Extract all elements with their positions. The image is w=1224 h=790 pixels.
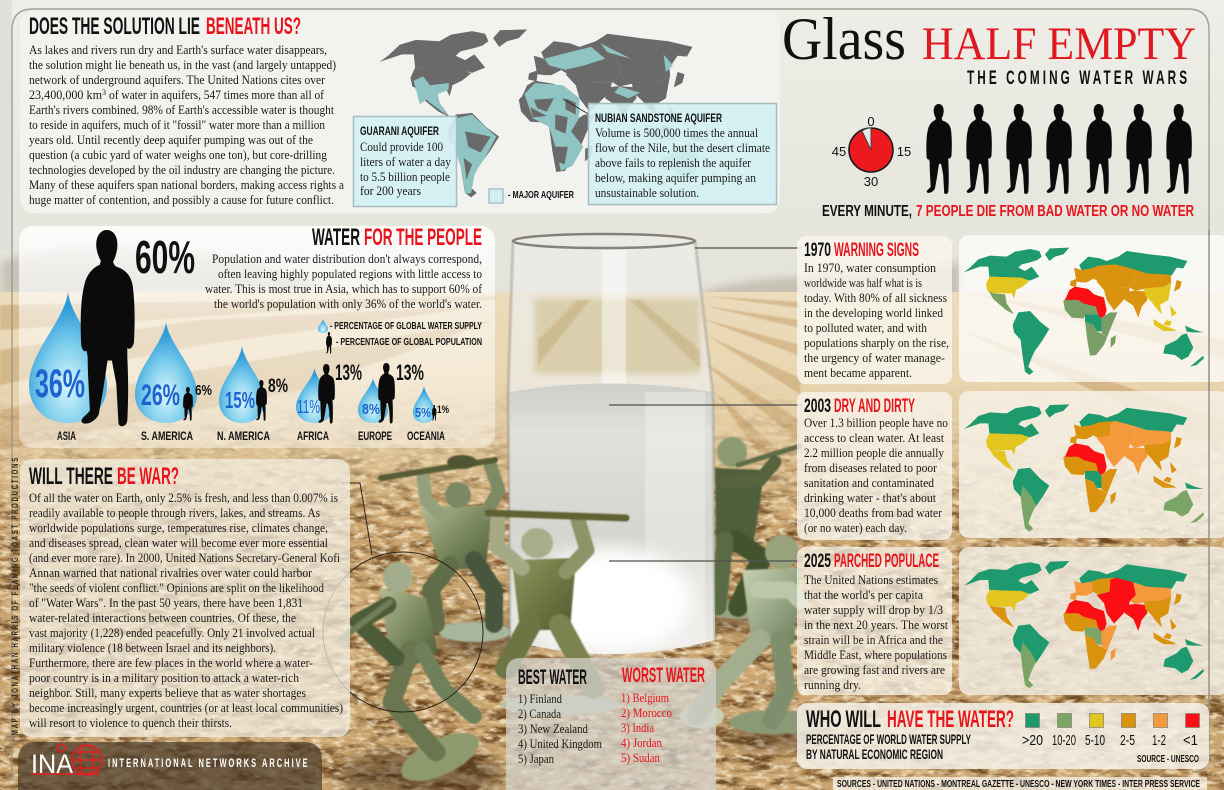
soldier: kneeling rifleman behind glass [707,437,800,619]
pictogram: Africa: 11% [297,397,320,417]
panel: best and worst water [506,658,716,790]
panel: 1970 warning signs: populations sharply on the rise, [804,336,949,350]
panel: 1970 warning signs: today. With 80% of all sickness [804,291,947,305]
background: distant hills [0,246,960,300]
panel: 1970 warning signs: 1970 [804,240,831,261]
soldier: foreground in circle [340,562,486,790]
heading: will there be war: BE WAR? [117,463,179,490]
panel: 2025 parched populace: PARCHED POPULACE [834,551,939,572]
pictogram: Africa: AFRICA [297,431,329,443]
panel: aquifers [20,11,780,213]
soldier: foreground right [680,535,821,734]
list: worst water: 2) Morocco [621,706,672,720]
panel: 2003 dry and dirty: (or no water) each day. [804,521,907,535]
pictogram: Oceania: OCEANIA [407,431,445,443]
logo: International Networks Archive: INTERNATIONAL NETWORKS ARCHIVE [108,757,308,771]
panel: 2003 dry and dirty: from diseases related to poor [804,461,938,475]
heading: water for the people: WATER [312,224,360,251]
pictogram: Europe: 8% [362,401,380,418]
text: aquifer body [29,43,344,207]
panel: 1970 warning signs: ment became apparent. [804,366,912,380]
panel: 2003 dry and dirty: DRY AND DIRTY [834,396,915,417]
title block: Glass [782,6,906,72]
text: population body: Population and water distribution don't always correspond, [212,252,482,266]
text: war body: vast majority (1,228) ended peacefully. Only 21 involved actual [29,626,315,640]
text: aquifer body: years old. Until recently deep aquifer pumping was out of the [29,133,313,147]
text: aquifer body: Earth's rivers combined. 98% of Earth's accessible water is thought [29,103,334,117]
pictogram: Africa [296,360,362,443]
legend: drop and person: - PERCENTAGE OF GLOBAL POPULATION [336,336,482,348]
text: war body: (and ever more rare). In 2000, United Nations Secretary-General Kofi [29,551,340,565]
legend: swatch labels: 10-20 [1052,732,1076,749]
heading: who will have the water: HAVE THE WATER? [887,706,1014,733]
text: legend description: PERCENTAGE OF WORLD WATER SUPPLY [806,731,971,747]
text: war body: Of all the water on Earth, only 2.5% is fresh, and less than 0.007% is [29,491,338,505]
pictogram: Europe: 13% [396,360,424,385]
background: sand [0,292,1224,790]
text: war body: Furthermore, there are few places in the world where a water- [29,656,313,670]
text: war body: will resort to violence to quench their thirsts. [29,716,232,730]
text: legend description [806,731,971,762]
pictogram: Europe: EUROPE [358,431,392,443]
heading: who will have the water [806,706,1014,733]
text: war body: neighbor. Still, many experts believe that as water shortages [29,686,306,700]
panel: 1970 warning signs [797,236,952,384]
pictogram: N. America: N. AMERICA [217,431,270,443]
pictogram: Asia: 36% [35,362,85,406]
seven people silhouettes [926,104,1192,194]
text: population body: often leaving highly populated regions with little access to [218,267,482,281]
panel: 1970 warning signs: WARNING SIGNS [834,240,919,261]
text: war body [29,491,343,730]
soldier: aiming overhead, centre [488,513,626,715]
soldier: raising rifle, rear left [381,455,511,642]
background: left strip [0,0,12,250]
clock icon: 45 [832,144,846,159]
title block: HALF EMPTY [922,18,1196,70]
pictogram: Oceania [407,386,449,443]
list: worst water: 1) Belgium [621,691,669,705]
panel: 2025 parched populace: running dry. [804,678,861,692]
shadows under soldiers [335,601,835,790]
text: war body: become increasingly urgent, countries (or at least local communities) [29,701,343,715]
text: war body: Annan warned that national rivalries over water could harbor [29,566,313,580]
panel: 2025 parched populace: strain will be in Africa and the [804,633,943,647]
callout: Guarani aquifer: GUARANI AQUIFER [360,124,439,138]
panel: 2003 dry and dirty: drinking water - that's about [804,491,936,505]
legend: swatch labels [1022,732,1198,749]
panel: 1970 warning signs: to polluted water, and with [804,321,928,335]
panel: 1970 warning signs: In 1970, water consumption [804,261,937,275]
list: best water: 3) New Zealand [518,722,589,736]
text: war body: and diseases spread, clean water will become ever more essential [29,536,328,550]
callout: Nubian sandstone aquifer: flow of the Nile, but the desert climate [595,141,770,155]
clock icon [832,114,911,189]
callout: Guarani aquifer [354,116,456,206]
list: worst water: 5) Sudan [621,751,661,765]
legend: swatch labels: 1-2 [1152,732,1166,749]
text: aquifer body: of water in aquifers, 547 times more than all of [109,88,325,102]
panel: 1970 warning signs: in the developing world linked [804,306,944,320]
background: desert sky [0,0,1224,300]
text: war body: readily available to people through rivers, lakes, and streams. As [29,506,320,520]
text: population body [205,252,483,311]
panel: who will have the water [797,703,1209,769]
text: war body: worldwide populations surge, temperatures rise, climates change, [29,521,328,535]
clock icon: 15 [897,144,911,159]
map: world aquifers [380,29,716,197]
text: war body: water-related interactions between countries. Of these, the [29,611,296,625]
legend: swatch labels: <1 [1183,732,1198,749]
panel: 2025 parched populace: water supply will drop by 1/3 [804,603,943,617]
list: best water: 5) Japan [518,752,555,766]
caption: every minute [822,203,1194,220]
list: best water: 4) United Kingdom [518,737,602,751]
list: best water: BEST WATER [518,666,587,689]
panel: 2003 dry and dirty: Over 1.3 billion people have no [804,416,948,430]
caption: every minute: EVERY MINUTE, [822,203,912,220]
pictogram: Oceania: 1% [437,404,449,416]
panel: will there be war [20,459,350,737]
text: aquifer body: question (a cubic yard of water weighs one ton), but core-drilling [29,148,328,162]
text: war body: "the seeds of violent conflict." Opinions are split on the likelihood [29,581,325,595]
list: best water: 1) Finland [518,692,563,706]
panel: 2025 parched populace: Middle East, where populations [804,648,947,662]
list: best water: 2) Canada [518,707,561,721]
callout: Nubian sandstone aquifer: below, making aquifer pumping an [595,171,757,185]
text: war body: of "Water Wars". In the past 50 years, there have been 1,831 [29,596,303,610]
panel: 1970 warning signs: worldwide was half what is is [804,276,922,290]
panel: 2003 dry and dirty: 10,000 deaths from bad water [804,506,943,520]
pictogram: Asia [29,230,195,443]
list: worst water [621,664,705,765]
vertical credit: MAP BY JONATHAN HARRIS OF FLAMING TOAST PRODUCTIONS [10,458,20,735]
map panel: 2025 [959,547,1224,695]
clock icon: 0 [867,114,875,129]
callout: Nubian sandstone aquifer: NUBIAN SANDSTONE AQUIFER [595,111,722,125]
pictogram: Asia: ASIA [57,431,76,443]
panel: 1970 warning signs: the urgency of water manage- [804,351,945,365]
glass of water [508,234,715,654]
clock icon: 30 [864,174,878,189]
legend: drop and person: - PERCENTAGE OF GLOBAL WATER SUPPLY [330,320,482,332]
title block [782,6,1196,89]
list: worst water: 4) Jordan [621,736,663,750]
map panel: 2003 [959,391,1224,538]
panel: 2025 parched populace: 2025 [804,551,831,572]
heading: beneath us: DOES THE SOLUTION LIE [29,13,200,40]
legend: colour swatches [1026,714,1200,728]
text: war body: military violence (18 between Israel and its neighbors). [29,641,276,655]
callout: Nubian sandstone aquifer [563,99,776,204]
legend: drop and person [318,319,482,354]
text: aquifer body: to reside in aquifers, much of it "fossil" water more than a million [29,118,326,132]
logo: International Networks Archive: INA [31,749,73,779]
panel: 2003 dry and dirty [797,392,952,540]
callout leader lines [609,248,802,561]
pictogram: N. America: 8% [268,376,288,397]
pictogram: N. America [217,346,288,443]
text: legend description: BY NATURAL ECONOMIC REGION [806,746,943,762]
panel: 2003 dry and dirty: 2003 [804,396,831,417]
pictogram: Africa: 13% [335,360,362,385]
legend: major aquifer [489,189,574,203]
panel: 2003 dry and dirty: sanitation and contaminated [804,476,935,490]
callout: Nubian sandstone aquifer: unsustainable solution. [595,186,699,200]
text: aquifer body: huge matter of contention, and possibly a cause for future conflict. [29,193,334,207]
legend: swatch labels: >20 [1022,732,1043,749]
panel: 2025 parched populace: in the next 20 years. The worst [804,618,948,632]
legend: swatch labels: 2-5 [1120,732,1135,749]
text: aquifer body: As lakes and rivers run dry and Earth's surface water disappears, [29,43,327,57]
pictogram: Europe [358,360,424,443]
heading: who will have the water: WHO WILL [806,706,881,733]
panel: 2003 dry and dirty: 2.2 million people die annually [804,446,945,460]
text: aquifer body: technologies developed by the oil industry are changing the picture. [29,163,335,177]
pictogram: Asia: 60% [135,231,195,283]
text: population body: water. This is most true in Asia, which has to support 60% of [205,282,483,296]
pictogram: N. America: 15% [225,387,255,413]
text: aquifer body: network of underground aquifers. The United Nations cites over [29,73,326,87]
panel: water for the people [19,224,495,448]
text: aquifer body: 3 [102,88,106,97]
panel: 2025 parched populace: that the world's per capita [804,588,923,602]
list: worst water: 3) India [621,721,654,735]
pictogram: Oceania: 5% [415,405,431,420]
list: best water [518,666,602,766]
logo: International Networks Archive [18,742,322,790]
panel: 2003 dry and dirty: access to clean water. At least [804,431,944,445]
pictogram: S. America: 6% [195,382,212,399]
text: population body: the world's population with only 36% of the world's water. [214,297,482,311]
panel: 2025 parched populace: The United Nations estimates [804,573,938,587]
map panel: 1970 [959,235,1224,382]
callout: Guarani aquifer: to 5.5 billion people [360,170,450,184]
frame right edge over maps [1208,230,1210,700]
heading: beneath us: BENEATH US? [206,13,301,40]
background: sand furrows [0,290,1224,470]
title block: THE COMING WATER WARS [967,68,1187,89]
text: aquifer body: the solution might lie beneath us, in the vast (and largely untapped) [29,58,336,72]
background: textured foreground [0,380,1224,790]
text: war body: poor country is in a military position to attack a water-rich [29,671,300,685]
legend: swatch labels: 5-10 [1085,732,1105,749]
callout: Guarani aquifer: for 200 years [360,184,421,198]
callout: Guarani aquifer: liters of water a day [360,155,452,169]
magnifier circle on soldier [323,483,483,712]
text: aquifer body: 23,400,000 km [29,88,102,102]
pictogram: S. America [135,322,212,443]
callout: Nubian sandstone aquifer: above fails to replenish the aquifer [595,156,752,170]
legend: major aquifer: - MAJOR AQUIFER [508,189,574,201]
heading: water for the people: FOR THE PEOPLE [364,224,482,251]
heading: water for the people [312,224,482,251]
text: aquifer body: Many of these aquifers span national borders, making access rights a [29,178,344,192]
heading: will there be war: WILL THERE [29,463,113,490]
panel: 2025 parched populace [797,547,952,695]
pictogram: S. America: S. AMERICA [141,431,193,443]
panel: 2025 parched populace: are growing fast and rivers are [804,663,945,677]
callout: Nubian sandstone aquifer: Volume is 500,000 times the annual [595,126,758,140]
callout: Guarani aquifer: Could provide 100 [360,140,443,154]
list: worst water: WORST WATER [622,664,705,687]
pictogram: S. America: 26% [141,379,180,412]
